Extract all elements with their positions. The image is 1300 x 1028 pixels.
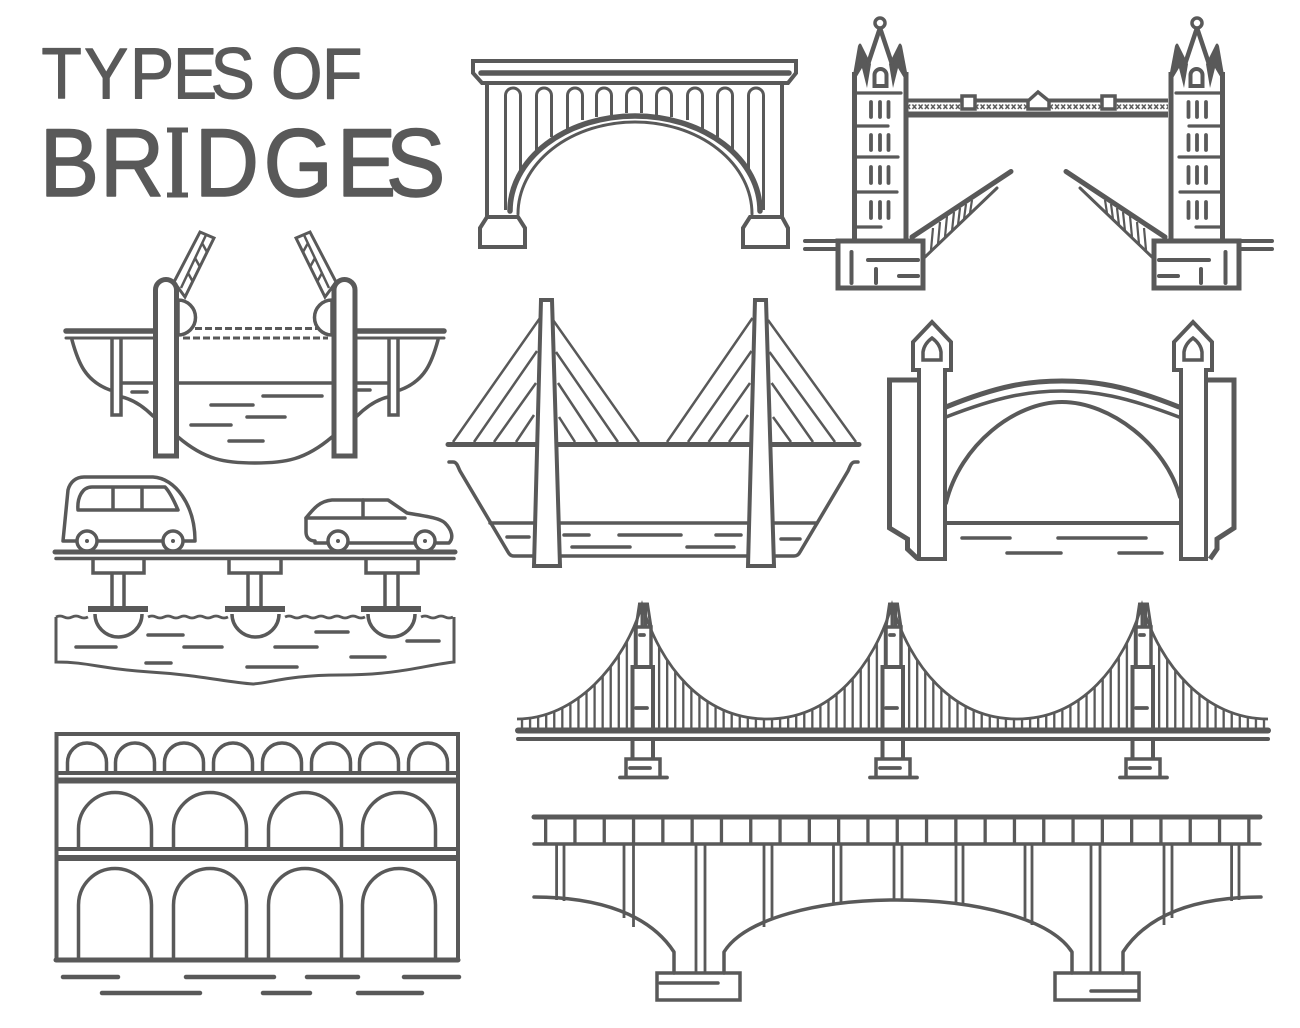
suspension bridge [517, 604, 1268, 778]
suspender hangers [517, 605, 1268, 730]
aqueduct frame [56, 734, 458, 960]
cable-stayed bridge [448, 300, 859, 566]
deck arch viaduct [534, 817, 1261, 1000]
raised bascule [912, 172, 1011, 257]
cable-stayed river and banks [449, 462, 858, 556]
title line: bridges: BRIDGES [40, 109, 445, 217]
drawbridge right leaf [296, 232, 336, 335]
water under road bridge [56, 616, 454, 684]
stone arch bridge [473, 61, 796, 247]
title line: types of: TYPES OF [41, 33, 362, 114]
arch bridge deck cap [473, 61, 796, 83]
top arches [68, 743, 448, 771]
cable-stayed deck [448, 442, 859, 447]
tower bridge [805, 18, 1272, 288]
pillars [88, 560, 421, 637]
viaduct foundations [657, 973, 1139, 1000]
left minaret tower [913, 322, 951, 559]
suspension tower one [620, 604, 667, 778]
viaduct columns [557, 844, 1239, 973]
drawbridge [66, 232, 444, 463]
drawbridge piers [156, 280, 355, 456]
arch bridge walls and piers [480, 83, 788, 247]
right tower and bascule [1066, 18, 1272, 288]
drawbridge legs [112, 338, 398, 415]
arched span [946, 381, 1180, 553]
van [63, 477, 195, 551]
viaduct arches [534, 897, 1261, 973]
bottom arches [78, 868, 436, 958]
suspension deck [518, 730, 1268, 739]
right minaret tower [1174, 322, 1212, 559]
stay cables [453, 318, 856, 442]
tower base [805, 241, 923, 288]
water lines [63, 977, 459, 993]
old stone arch bridge [890, 322, 1234, 559]
car [306, 500, 452, 551]
middle arches [78, 792, 436, 848]
road deck [55, 552, 455, 558]
aqueduct [56, 734, 459, 993]
left tower and bascule [805, 18, 1011, 288]
main cable [517, 605, 1268, 719]
suspension tower two [870, 604, 917, 778]
side walls [890, 380, 1234, 559]
tower body [853, 18, 908, 240]
tower bridge walkway [908, 92, 1168, 114]
drawbridge road and dashed span [66, 328, 444, 338]
drawbridge river and banks [72, 340, 438, 463]
cable-stayed towers [534, 300, 774, 566]
arch bridge slots [506, 88, 764, 210]
title [40, 33, 445, 217]
drawbridge raised leaves [174, 232, 214, 335]
suspension tower three [1120, 604, 1167, 778]
arch bridge main arch [510, 116, 760, 214]
road bridge with vehicles [55, 477, 455, 684]
viaduct railing [534, 817, 1260, 844]
